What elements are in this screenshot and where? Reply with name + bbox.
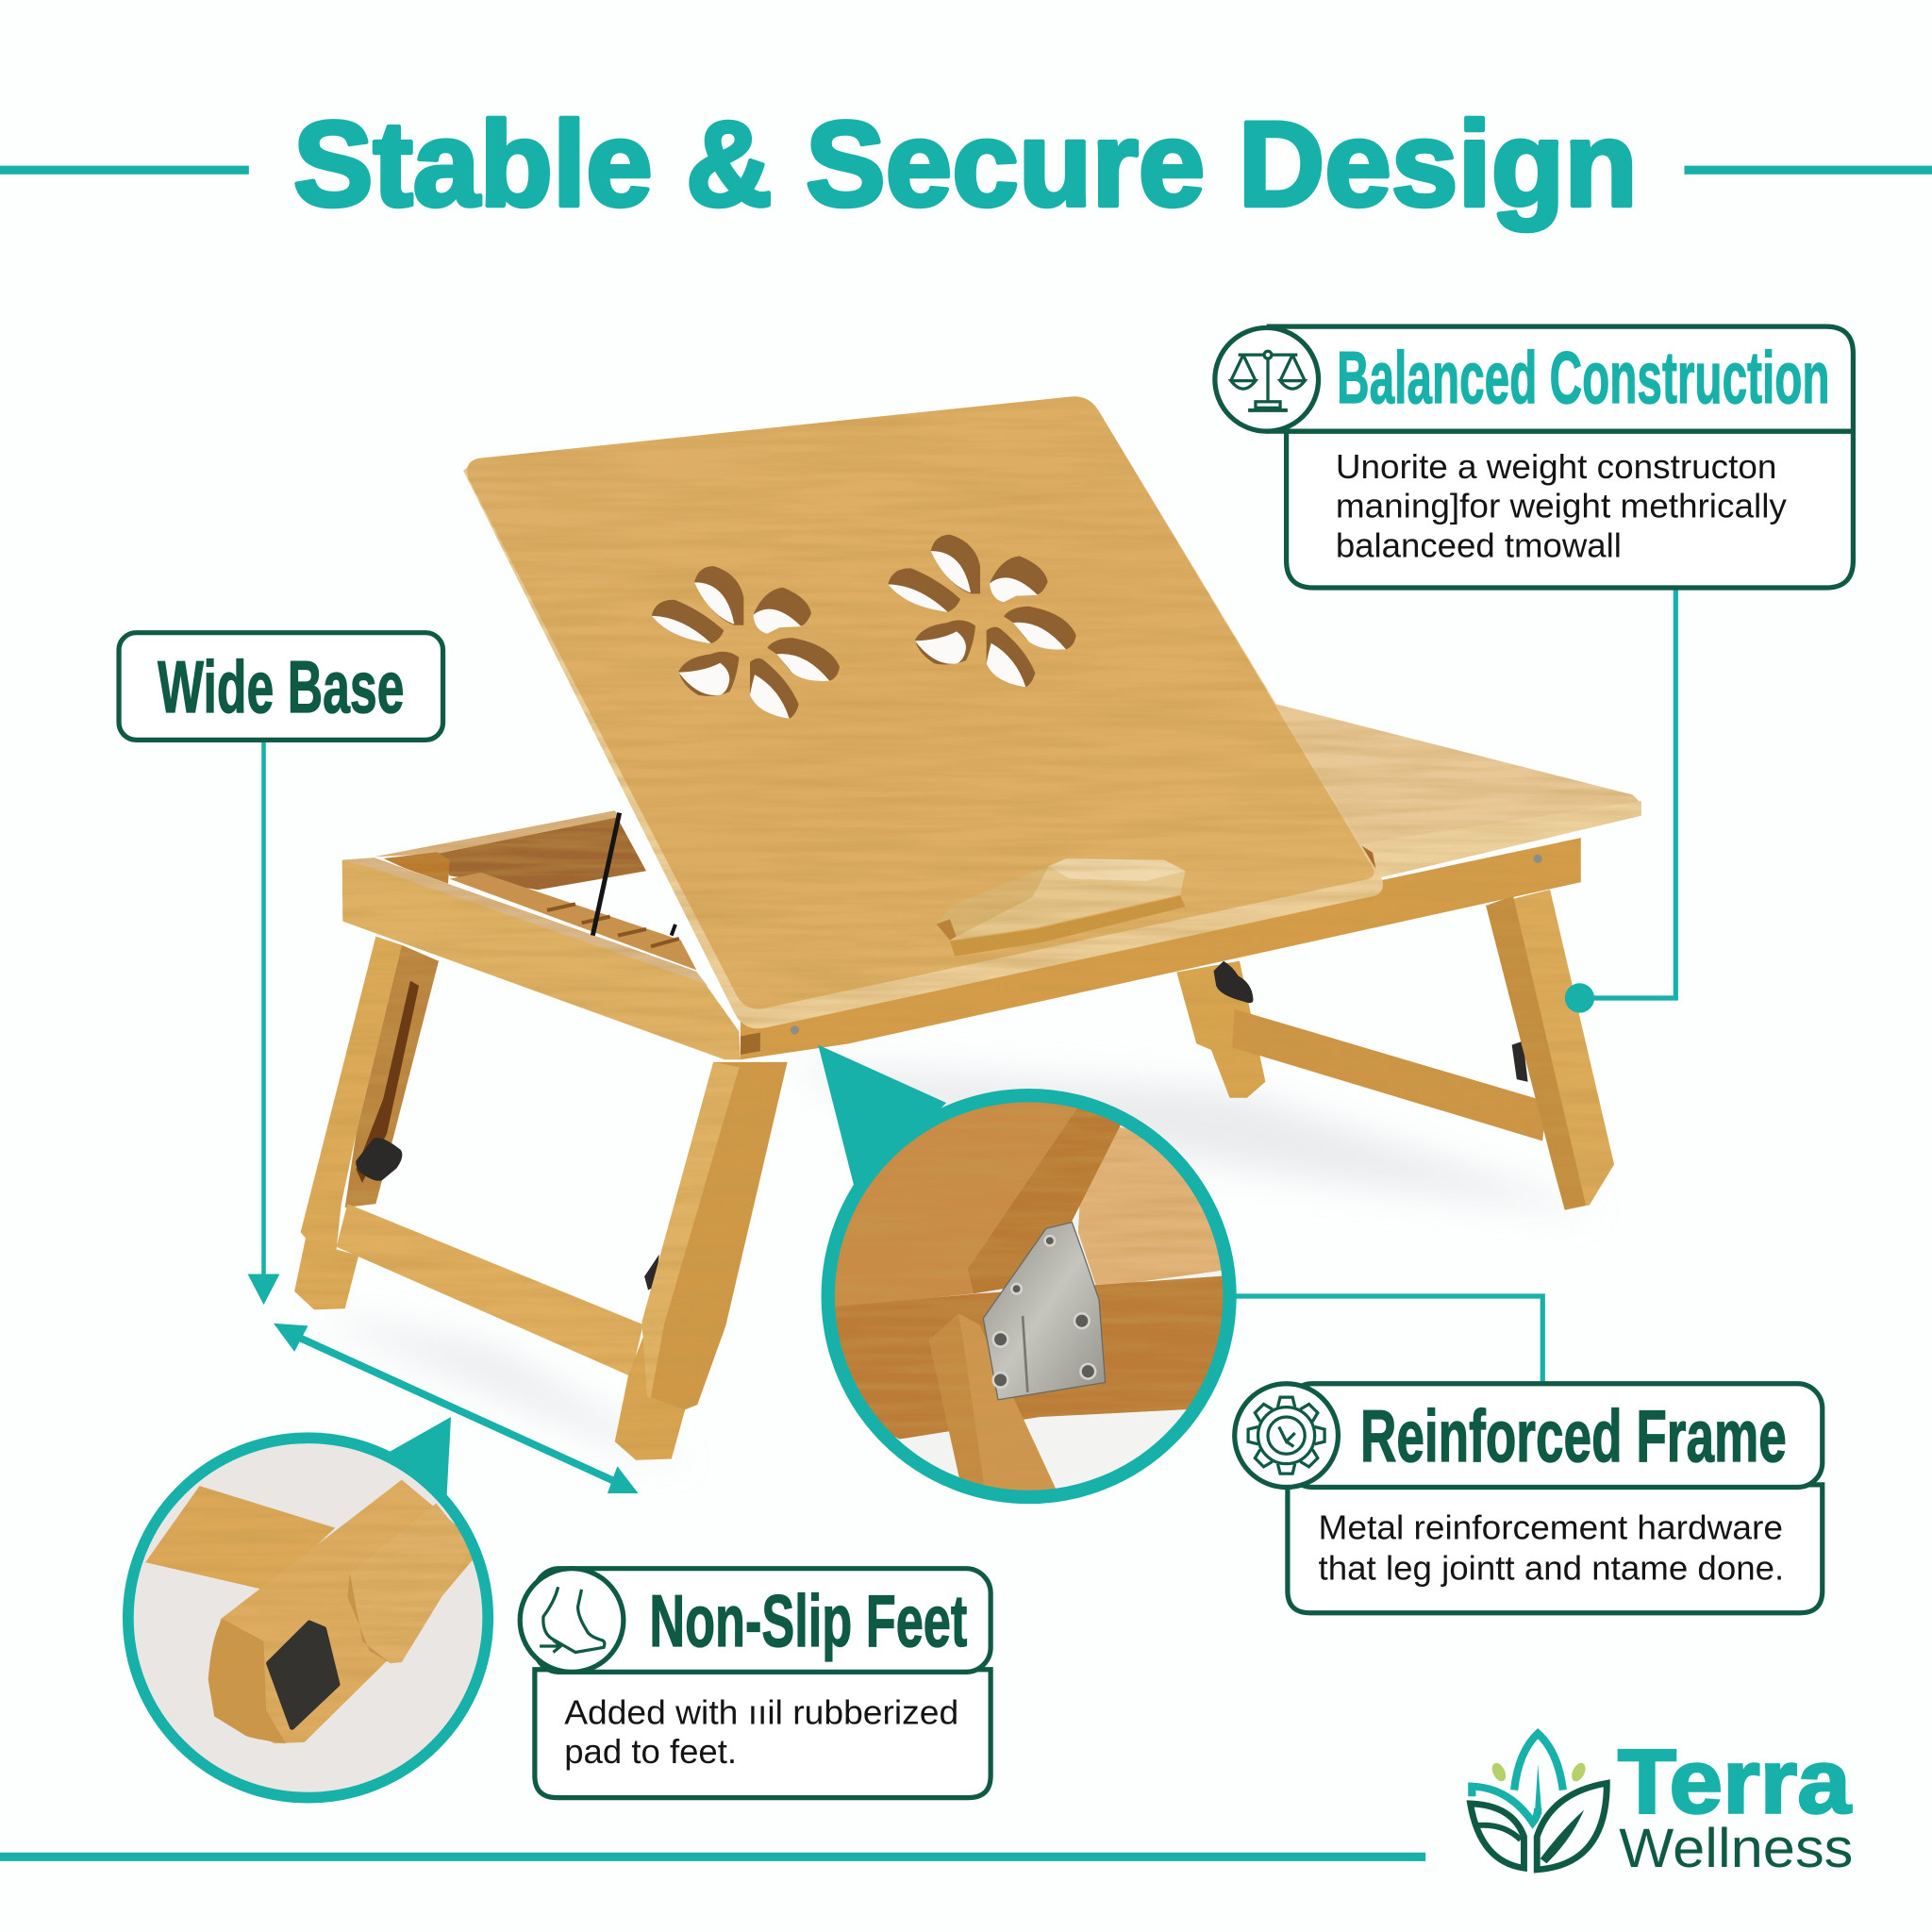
panel: balanced construction: maning]for weight methrically: [1336, 487, 1787, 525]
leg slot and knob: [356, 961, 1253, 1183]
panel: non-slip feet: pad to feet.: [564, 1732, 737, 1771]
callout: wide base: [119, 633, 443, 740]
logo: terra wellness: [1471, 1731, 1853, 1879]
title: Stable & Secure Design: [293, 97, 1638, 232]
logo: terra wellness: Wellness: [1619, 1818, 1853, 1879]
panel: reinforced frame: that leg jointt and ntame done.: [1319, 1548, 1784, 1587]
callout arrow: wide base vertical: [248, 740, 279, 1305]
icon: balance scale: [1215, 327, 1319, 431]
panel: reinforced frame: [1235, 1384, 1823, 1613]
callout: wide base: Wide Base: [158, 645, 404, 728]
detail circle: rubber foot pad: [125, 1417, 491, 1800]
product photo: bamboo lap desk: [294, 396, 1641, 1466]
logo: terra wellness: Terra: [1618, 1731, 1852, 1832]
icon: foot: [520, 1569, 624, 1672]
panel: non-slip feet: [520, 1569, 991, 1798]
detail circle: metal joint: [813, 1045, 1232, 1500]
cooling cutouts: two flowers: [652, 535, 1076, 719]
bottom rule: [0, 1853, 1425, 1861]
dimension arrow: base width: [274, 1324, 639, 1493]
panel: non-slip feet: Non-Slip Feet: [649, 1579, 967, 1662]
knobs behind legs: [644, 1041, 1528, 1291]
connector: reinforced frame: [1236, 1296, 1542, 1382]
panel: balanced construction: [1215, 326, 1853, 588]
panel: reinforced frame: Metal reinforcement hardware: [1319, 1507, 1783, 1546]
icon: gear: [1235, 1384, 1338, 1487]
panel: non-slip feet: Added with ııil rubberized: [564, 1692, 958, 1731]
connector: balanced construction: [1565, 589, 1675, 1013]
panel: balanced construction: Unorite a weight constructon: [1336, 447, 1776, 486]
icon: leaf mark: [1471, 1734, 1607, 1870]
panel: balanced construction: balanceed tmowall: [1336, 525, 1622, 564]
frame, slats and lid support: [342, 810, 741, 1059]
